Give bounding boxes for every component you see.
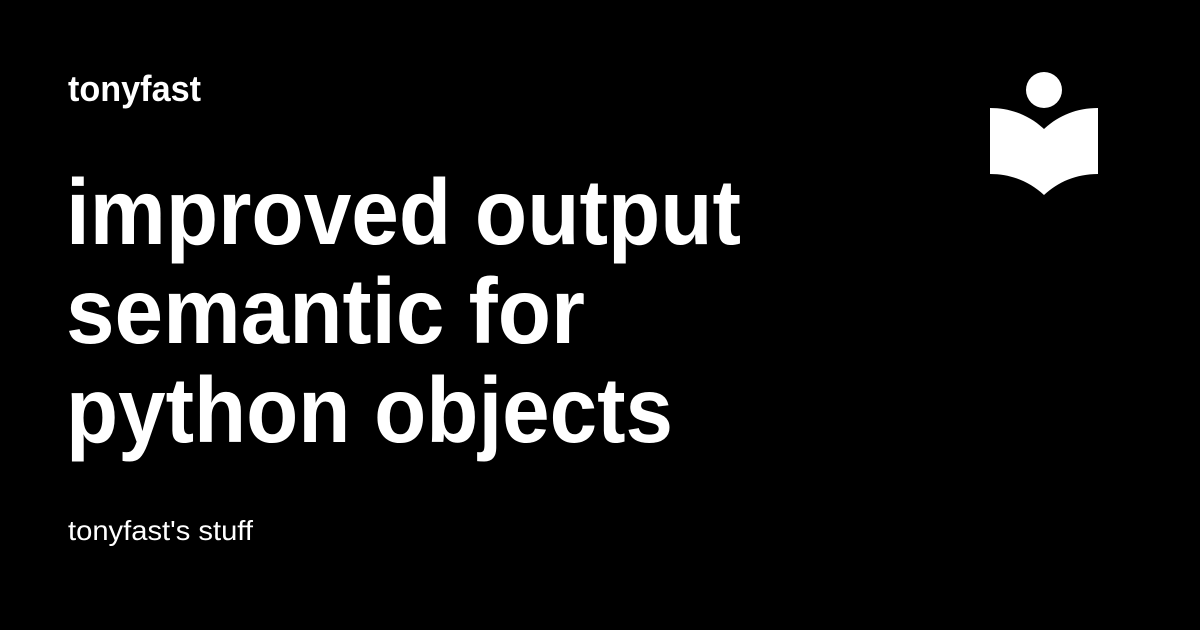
icon: head (1026, 72, 1062, 108)
icon: open book (990, 108, 1098, 195)
site name: tonyfast (68, 68, 201, 109)
icon: reader with open book (990, 72, 1098, 195)
title line 2: semantic for (66, 259, 585, 363)
title line 1: improved output (66, 160, 741, 264)
title line 3: python objects (66, 358, 673, 462)
site description: tonyfast's stuff (68, 515, 253, 546)
title (66, 160, 741, 462)
